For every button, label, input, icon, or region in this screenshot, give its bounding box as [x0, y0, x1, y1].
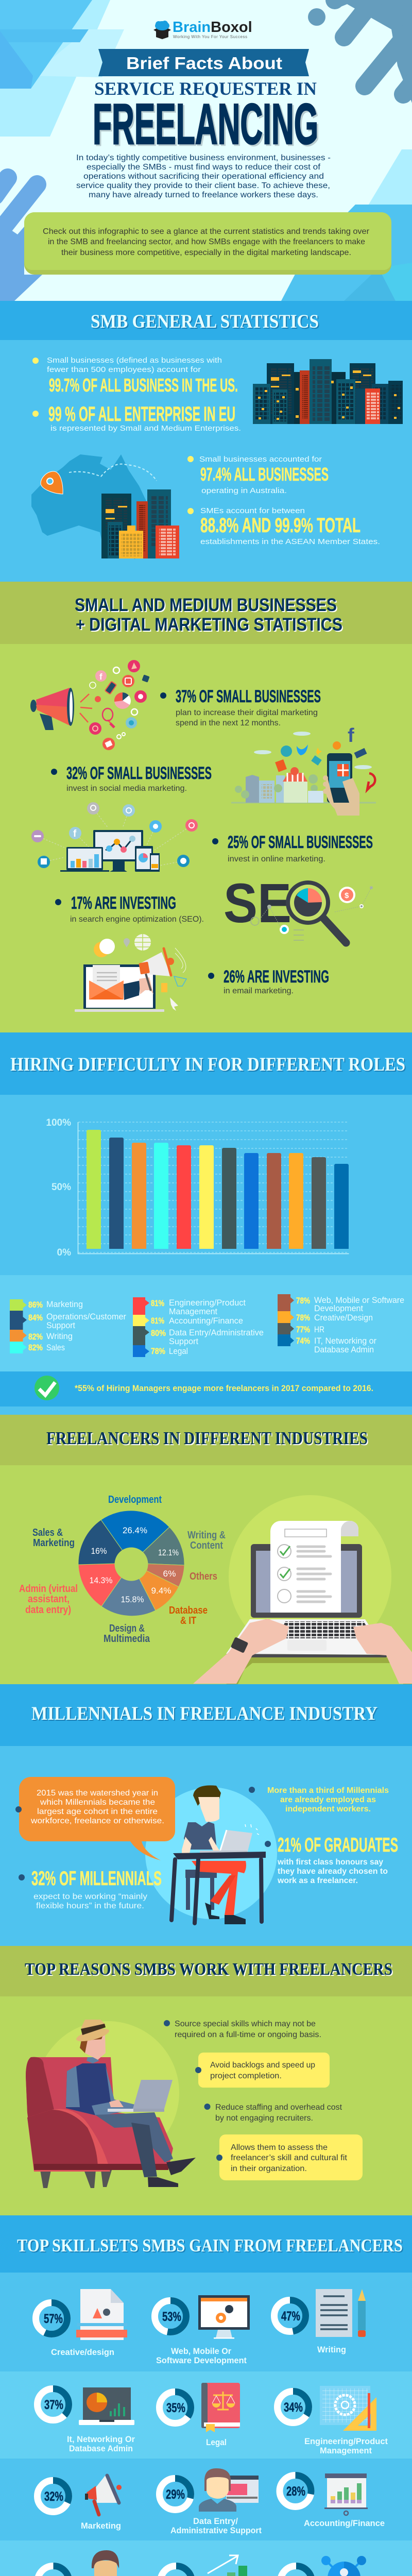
skill: web development	[154, 2295, 250, 2365]
legend: column 3: Database Admin	[314, 1345, 374, 1354]
legend: column 1: 82%	[28, 1332, 43, 1342]
donut chart: industries: 26.4%	[123, 1526, 147, 1535]
skill: sales	[161, 2555, 260, 2576]
skill: IT networking: Database Admin	[69, 2444, 133, 2453]
heading: + DIGITAL MARKETING STATISTICS	[76, 615, 342, 635]
banner: Brief Facts About: Brief Facts About	[126, 54, 282, 73]
reason: source special skills: required on a full-time or ongoing basis.	[175, 2030, 321, 2039]
stat: 21% of graduates: with first class honours say	[277, 1858, 383, 1867]
skill: data entry	[160, 2468, 262, 2535]
bullet: US stat: fewer than 500 employees) account for	[47, 365, 201, 374]
stat: 17%	[55, 893, 204, 924]
donut chart: industries: Admin (virtual	[19, 1583, 78, 1595]
skill: engineering: Engineering/Product	[304, 2436, 388, 2446]
legend: column 3: 74%	[296, 1336, 310, 1346]
skill: creative/design: 57%	[44, 2312, 63, 2326]
banner: Brief Facts About	[98, 49, 309, 76]
skill: web development: Web, Mobile Or	[171, 2346, 231, 2356]
legend: column 3: IT, Networking or	[314, 1336, 376, 1346]
skill: accounting: 28%	[286, 2484, 305, 2499]
donut chart: industries: 15.8%	[121, 1595, 144, 1604]
icon: megaphone with social icons: f	[99, 672, 102, 682]
skill: web development: 53%	[162, 2310, 181, 2324]
skill: data entry: Administrative Support	[170, 2526, 262, 2535]
legend: column 1: Marketing	[46, 1299, 83, 1309]
donut chart: industries: Writing &	[187, 1530, 226, 1541]
reason: assess fit: in their organization.	[231, 2164, 307, 2173]
icon: SEO magnifying glass: $	[345, 891, 349, 900]
stat: third of millennials: are already employed as	[280, 1795, 376, 1804]
stat: 37%	[160, 687, 321, 727]
stat: 32% of millennials: flexible hours” in the future.	[36, 1902, 144, 1910]
reason: source special skills	[164, 2020, 321, 2039]
bullet: Australia stat: 97.4% ALL BUSINESSES	[200, 464, 329, 485]
donut chart: industries: 9.4%	[151, 1586, 171, 1596]
panel: SMB general statistics	[0, 301, 412, 582]
icon: SEO magnifying glass	[224, 872, 373, 943]
donut chart: industries: 14.3%	[90, 1575, 112, 1585]
skill: marketing	[37, 2475, 122, 2531]
reason: assess fit	[216, 2134, 363, 2180]
donut chart: industries: Marketing	[33, 1537, 75, 1549]
skill: legal: Legal	[206, 2437, 227, 2447]
intro paragraph: especially the SMBs - must find ways to reduce their cost of	[87, 163, 321, 172]
bullet: ASEAN stat	[187, 506, 380, 546]
callout: 55% of hiring managers: *55% of Hiring Managers engage more freelancers in 2017 compared to 2016.	[75, 1383, 373, 1393]
stat: third of millennials: More than a third of Millennials	[267, 1786, 389, 1795]
stat: 26%	[208, 967, 329, 995]
skill: IT networking: 37%	[44, 2398, 63, 2412]
heading: SMB GENERAL STATISTICS	[91, 311, 319, 332]
panel: top reasons	[0, 1946, 412, 2215]
callout: 55% of hiring managers	[0, 1371, 412, 1415]
speech bubble: 2015 watershed year: 2015 was the watershed year in	[37, 1789, 158, 1798]
stat: 26%: 26% ARE INVESTING	[224, 967, 329, 987]
reason: avoid backlogs: project completion.	[210, 2072, 282, 2080]
donut chart: industries: & IT	[180, 1615, 196, 1626]
stat: 32% of millennials	[19, 1868, 162, 1910]
bullet: EU stat: 99 % OF ALL ENTERPRISE IN EU	[48, 403, 235, 426]
icon: SEO magnifying glass: SE	[224, 872, 291, 934]
panel: digital marketing statistics	[0, 582, 412, 1032]
intro paragraph: operations without sacrificing their operational efficiency and	[83, 172, 324, 181]
donut chart: industries: 16%	[91, 1546, 107, 1556]
bullet: EU stat: is represented by Small and Medium Enterprises.	[50, 424, 241, 433]
donut chart: industries	[19, 1494, 226, 1645]
bullet: US stat: Small businesses (defined as businesses with	[47, 356, 222, 365]
legend: column 2: 80%	[151, 1328, 166, 1338]
legend: column 1: 86%	[28, 1300, 43, 1310]
legend: column 3	[278, 1294, 404, 1354]
panel: green callout: Check out this infographic to see a glance at the current statistics and trends taking over	[43, 227, 370, 236]
stat: 21% of graduates: they have already chosen to	[278, 1867, 388, 1876]
logo: BrainBoxol	[153, 19, 252, 39]
legend: column 1: Sales	[46, 1343, 65, 1352]
skill: data entry: Data Entry/	[193, 2516, 238, 2526]
icon: laptop checklist with hands	[193, 1495, 412, 1684]
panel: green callout: in the SMB and freelancing sector, and how SMBs engage with the freelancers to make	[48, 238, 365, 246]
logo tagline: Working With You For Your Success	[173, 35, 247, 39]
legend: column 1: Support	[46, 1320, 75, 1330]
stat: 32%	[51, 764, 212, 793]
bullet: Australia stat: Small businesses accounted for	[199, 455, 322, 464]
legend: column 1: Writing	[46, 1331, 73, 1341]
logo wordmark: BrainBoxol	[173, 19, 252, 36]
stat: 26%: in email marketing.	[224, 987, 294, 995]
donut chart: industries: Development	[108, 1494, 162, 1505]
intro paragraph: many have already turned to freelance workers these days.	[89, 191, 318, 199]
stat: 37%: plan to increase their digital marketing	[176, 708, 318, 717]
icon: Australia map with city	[31, 454, 179, 559]
donut chart: industries: data entry)	[25, 1604, 71, 1616]
stat: 21% of graduates	[265, 1834, 398, 1885]
skill: writing: Writing	[317, 2345, 346, 2354]
legend: column 2: 81%	[151, 1316, 164, 1326]
bullet: US stat: 99.7% OF ALL BUSINESS IN THE US.	[49, 375, 238, 396]
icon: connected devices: f	[73, 828, 77, 839]
skill: others	[280, 2556, 366, 2576]
stat: third of millennials	[249, 1786, 389, 1814]
title: service requester in: SERVICE REQUESTER IN	[94, 78, 317, 99]
intro paragraph: service quality they provide to their client base. To achieve these,	[76, 181, 330, 190]
skill: accounting	[280, 2473, 385, 2528]
reason: reduce staffing: Reduce staffing and overhead cost	[215, 2103, 342, 2112]
legend: column 2: Data Entry/Administrative	[169, 1328, 264, 1337]
donut chart: industries: 12.1%	[158, 1548, 179, 1557]
legend: column 2: Engineering/Product	[169, 1298, 246, 1308]
bar chart: 0%	[57, 1247, 71, 1258]
legend: column 3: 77%	[296, 1325, 310, 1334]
legend: column 2: Legal	[169, 1346, 188, 1356]
skill: writing	[274, 2289, 366, 2354]
skill: IT networking: It, Networking Or	[67, 2434, 135, 2444]
donut chart: industries: Content	[190, 1540, 223, 1551]
legend: column 2: Management	[169, 1307, 217, 1316]
skill: engineering: Management	[320, 2446, 372, 2455]
skill: HR	[38, 2550, 127, 2576]
stat: 37%: spend in the next 12 months.	[176, 719, 281, 727]
speech bubble: 2015 watershed year: largest age cohort in the entire	[37, 1807, 158, 1816]
stat: 32% of millennials: 32% OF MILLENNIALS	[31, 1868, 162, 1890]
legend: column 1: 82%	[28, 1343, 43, 1352]
skill: legal	[160, 2383, 240, 2447]
legend: column 1: Operations/Customer	[46, 1312, 126, 1321]
heading	[75, 595, 342, 635]
bar chart	[46, 1117, 349, 1258]
icon: city skyline	[253, 359, 403, 424]
icon: connected devices	[31, 802, 198, 872]
legend: column 3: 78%	[296, 1313, 310, 1323]
legend: column 1: 84%	[28, 1313, 43, 1323]
donut chart: industries: Database	[169, 1605, 208, 1616]
bullet: EU stat	[32, 403, 241, 433]
stat: 21% of graduates: work as a freelancer.	[277, 1876, 358, 1885]
icon: megaphone with social icons	[30, 660, 150, 750]
reason: avoid backlogs: Avoid backlogs and speed up	[210, 2061, 315, 2070]
heading: MILLENNIALS IN FREELANCE INDUSTRY	[31, 1703, 377, 1724]
bullet: ASEAN stat: SMEs account for between	[200, 506, 305, 515]
icon: smartphone shopping city	[231, 725, 376, 816]
skill: engineering	[277, 2386, 388, 2455]
skill: creative/design: Creative/design	[51, 2347, 114, 2357]
bullet: US stat	[32, 356, 238, 396]
panel: green callout	[24, 212, 391, 275]
reason: assess fit: Allows them to assess the	[231, 2143, 328, 2152]
panel: green callout: their business more competitive, especially in the digital marketing landscape.	[61, 248, 351, 257]
donut chart: industries: Design &	[109, 1623, 145, 1634]
legend: column 3: Creative/Design	[314, 1313, 373, 1323]
legend: column 3: Development	[314, 1303, 363, 1313]
skill: legal: 35%	[166, 2401, 185, 2415]
intro paragraph	[76, 154, 331, 199]
stat: third of millennials: independent workers.	[285, 1805, 371, 1814]
intro paragraph: In today’s tightly competitive business environment, businesses -	[76, 154, 331, 162]
speech bubble: 2015 watershed year	[15, 1777, 175, 1860]
skill: marketing: Marketing	[81, 2521, 121, 2531]
panel: hiring difficulty	[0, 1032, 412, 1371]
bullet: Australia stat: operating in Australia.	[201, 486, 287, 495]
stat: 17%: 17% ARE INVESTING	[71, 893, 176, 913]
donut chart: industries: Sales &	[32, 1527, 63, 1538]
bullet: Australia stat	[187, 455, 329, 495]
stat: 25%	[212, 833, 373, 863]
donut chart: industries: assistant,	[28, 1594, 70, 1605]
donut chart: industries: Multimedia	[104, 1633, 150, 1645]
legend: column 3: Web, Mobile or Software	[314, 1295, 404, 1305]
legend: column 2: Support	[169, 1336, 198, 1346]
skill: creative/design	[36, 2289, 127, 2357]
icon: millennial at desk	[145, 1785, 277, 1924]
speech bubble: 2015 watershed year: which Millennials became the	[40, 1798, 155, 1807]
bar chart: 50%	[52, 1182, 71, 1193]
stat: 17%: in search engine optimization (SEO).	[70, 915, 204, 924]
reason: reduce staffing: by not engaging recruiters.	[215, 2114, 313, 2123]
reason: reduce staffing	[204, 2103, 342, 2123]
legend: column 2: 81%	[151, 1298, 164, 1308]
icon: man in armchair with laptop	[26, 2020, 196, 2188]
stat: 25%: invest in online marketing.	[228, 855, 325, 863]
skill: writing: 47%	[281, 2309, 300, 2324]
icon: email marketing laptop	[75, 934, 186, 1012]
bar chart: 100%	[46, 1117, 71, 1128]
skill: marketing: 32%	[44, 2489, 63, 2504]
reason: avoid backlogs	[195, 2053, 330, 2088]
skill: data entry: 29%	[166, 2487, 185, 2502]
skill: web development: Software Development	[156, 2355, 247, 2365]
reason: assess fit: freelancer’s skill and cultural fit	[231, 2154, 348, 2162]
stat: 32% of millennials: expect to be working “mainly	[33, 1892, 147, 1901]
legend: column 3: 78%	[296, 1296, 310, 1306]
icon: brain in a box	[153, 21, 171, 39]
stat: 32%: invest in social media marketing.	[66, 784, 187, 793]
panel: freelancers in different industries	[0, 1415, 412, 1684]
legend: column 2: Accounting/Finance	[169, 1316, 243, 1326]
hero background panel	[0, 0, 412, 301]
donut chart: industries: Others	[190, 1571, 217, 1582]
panel: millennials in freelance industry	[0, 1684, 412, 1946]
legend: column 2	[133, 1297, 264, 1357]
reason: source special skills: Source special skills which may not be	[175, 2020, 316, 2028]
heading: SMALL AND MEDIUM BUSINESSES	[75, 595, 337, 615]
skill: engineering: 34%	[284, 2400, 303, 2415]
legend: column 2: 78%	[151, 1346, 165, 1356]
icon: smartphone shopping city: f	[348, 725, 354, 747]
legend: column 3: HR	[314, 1325, 324, 1334]
skill: IT networking	[37, 2387, 135, 2453]
legend: column 1	[10, 1299, 126, 1353]
bullet: ASEAN stat: establishments in the ASEAN Member States.	[200, 537, 380, 546]
skill: accounting: Accounting/Finance	[304, 2518, 385, 2528]
donut chart: industries: 6%	[163, 1569, 176, 1579]
stat: 32%: 32% OF SMALL BUSINESSES	[66, 764, 212, 783]
panel: top skillsets	[0, 2215, 412, 2576]
speech bubble: 2015 watershed year: workforce, freelance or otherwise.	[30, 1817, 164, 1825]
